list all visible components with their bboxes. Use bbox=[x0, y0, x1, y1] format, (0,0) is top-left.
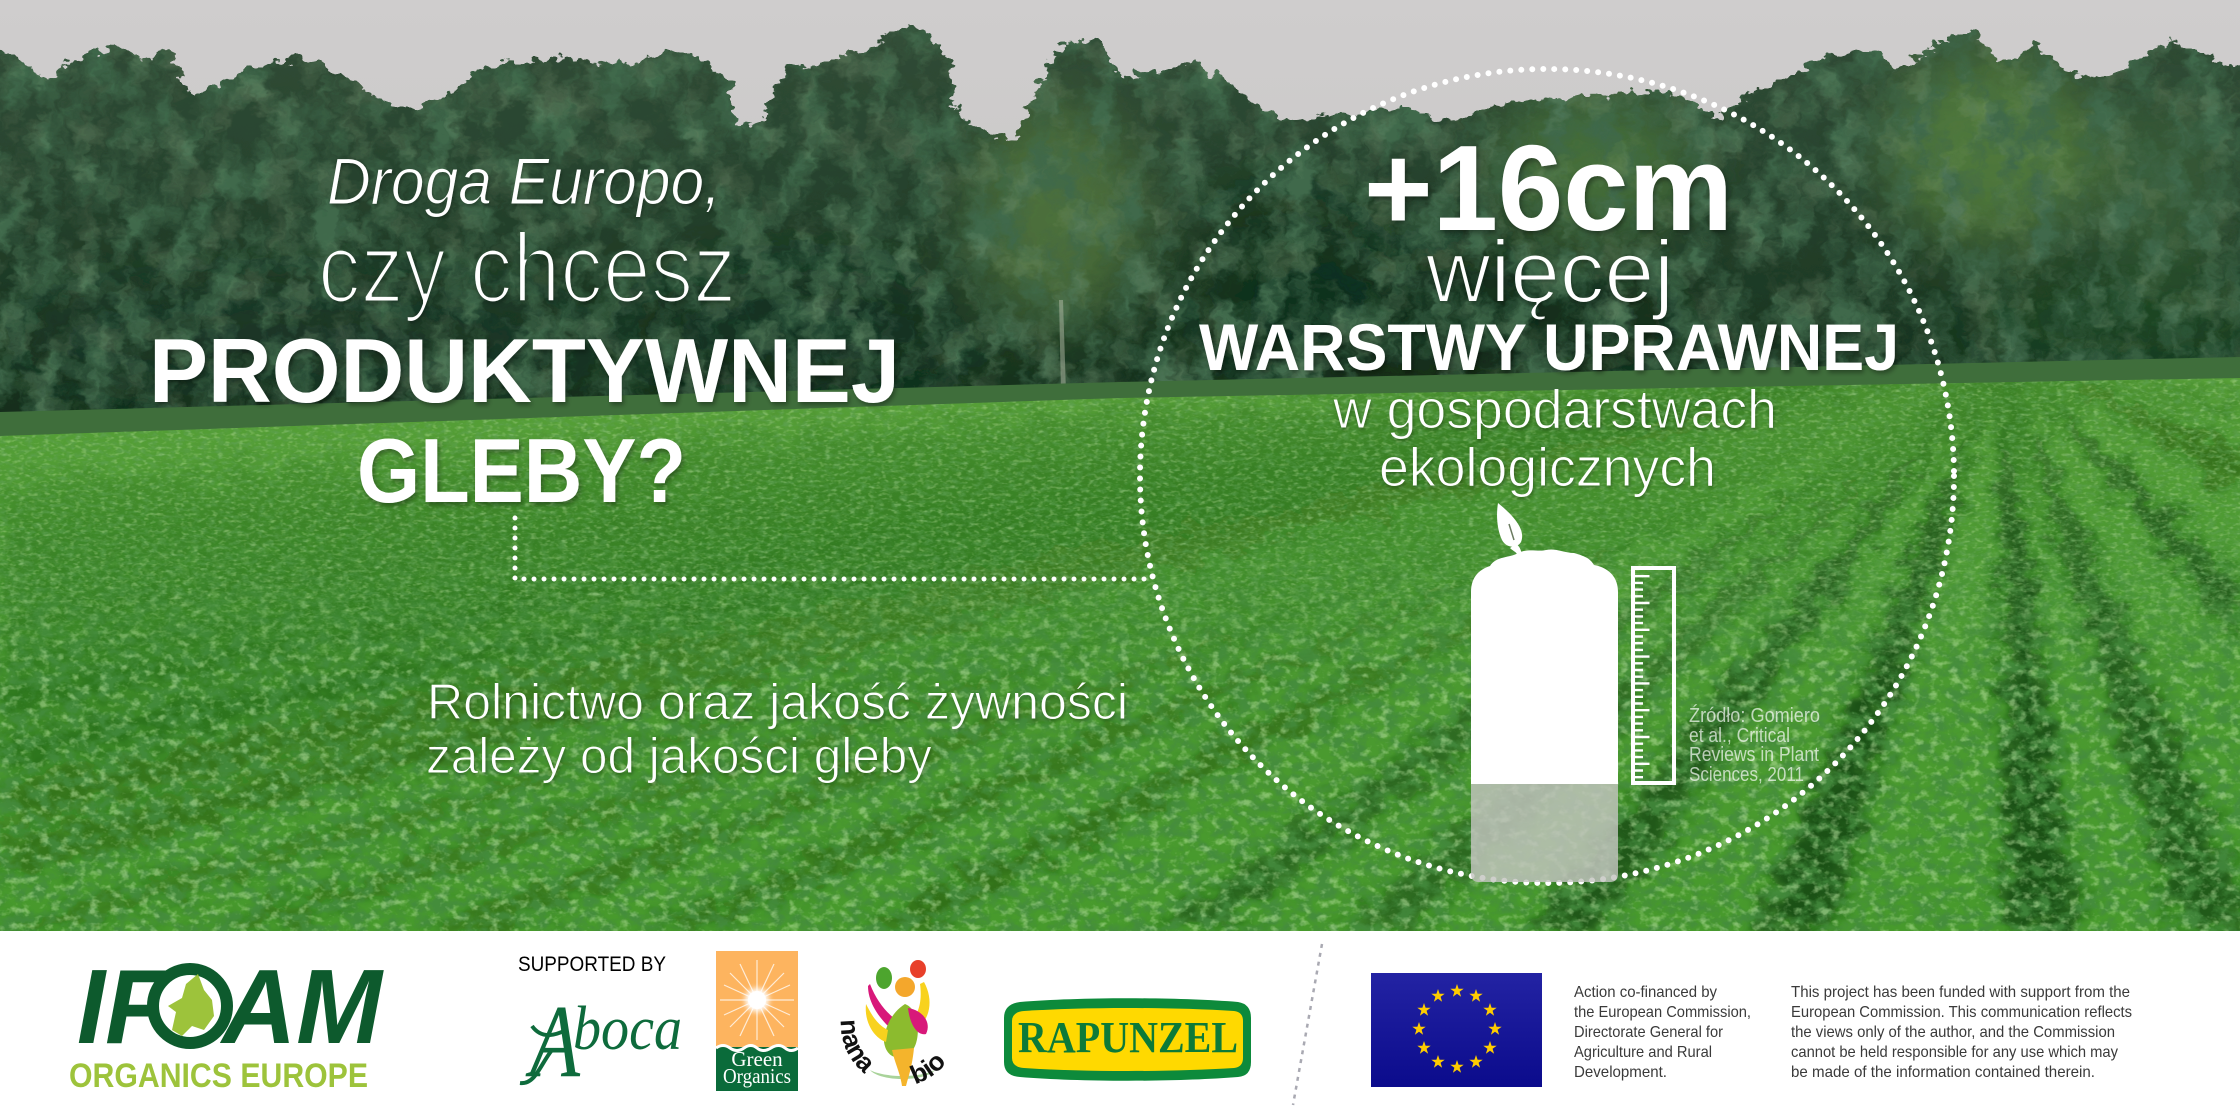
grass strip behind field bbox=[0, 357, 2240, 440]
headline line: GLEBY: GLEBY? bbox=[357, 421, 686, 522]
headline line: czy chcesz: czy chcesz bbox=[318, 213, 736, 323]
co-financing note: Agriculture and Rural bbox=[1574, 1044, 1712, 1061]
logo letters IF: IF bbox=[77, 948, 170, 1066]
body text: soil quality: zależy od jakości gleby bbox=[426, 728, 932, 784]
logo: Rapunzel bbox=[1004, 998, 1251, 1081]
source note: et al., Critical bbox=[1689, 725, 1790, 747]
disclaimer note: cannot be held responsible for any use which may bbox=[1791, 1044, 2118, 1061]
logo: Aboca: boca bbox=[573, 995, 682, 1063]
statistic label: więcej: więcej bbox=[1425, 222, 1674, 321]
logo: Green Organics: Green bbox=[731, 1047, 783, 1071]
headline line: Droga Europo: Droga Europo, bbox=[327, 144, 721, 218]
statistic: +16cm: +16cm bbox=[1364, 120, 1733, 256]
disclaimer note: This project has been funded with support from the bbox=[1791, 984, 2130, 1001]
icon: ruler scale bbox=[1633, 568, 1674, 783]
source note: Źródło: Gomiero bbox=[1689, 704, 1820, 727]
disclaimer note: European Commission. This communication reflects bbox=[1791, 1004, 2132, 1021]
logo globe with Europe bbox=[153, 969, 227, 1043]
supported by label: SUPPORTED BY bbox=[518, 953, 666, 976]
logo: Aboca bbox=[520, 984, 682, 1099]
disclaimer note: the views only of the author, and the Commission bbox=[1791, 1024, 2115, 1041]
logo: Green Organics: Organics bbox=[723, 1064, 791, 1088]
body text: soil quality bbox=[426, 674, 1128, 784]
co-financing note bbox=[1574, 984, 1751, 1081]
footer band bbox=[0, 931, 2240, 1120]
statistic label: WARSTWY UPRAWNEJ: WARSTWY UPRAWNEJ bbox=[1199, 310, 1899, 384]
co-financing note: Action co-financed by bbox=[1574, 984, 1717, 1001]
dotted footer divider bbox=[1293, 944, 1322, 1105]
dotted connector from headline to circle bbox=[515, 518, 1150, 579]
sun bbox=[720, 960, 794, 1040]
birch trunk bbox=[1059, 300, 1066, 392]
source note bbox=[1689, 704, 1820, 786]
circle statistic text bbox=[1199, 120, 1899, 498]
body text: soil quality: Rolnictwo oraz jakość żywności bbox=[427, 674, 1128, 730]
logo letters AM: AM bbox=[219, 948, 385, 1066]
icon: soil candle with sprout bbox=[1471, 503, 1618, 882]
disclaimer note bbox=[1791, 984, 2132, 1081]
co-financing note: Development. bbox=[1574, 1064, 1667, 1081]
headline line: PRODUKTYWNEJ: PRODUKTYWNEJ bbox=[149, 321, 900, 422]
logo: Rapunzel: RAPUNZEL bbox=[1018, 1013, 1238, 1062]
source note: Reviews in Plant bbox=[1689, 744, 1819, 766]
disclaimer note: be made of the information contained therein. bbox=[1791, 1064, 2095, 1081]
background sky bbox=[0, 0, 2240, 460]
source note: Sciences, 2011 bbox=[1689, 764, 1804, 786]
statistic label: w gospodarstwach: w gospodarstwach bbox=[1332, 378, 1777, 440]
logo: Green Organics bbox=[716, 951, 798, 1091]
co-financing note: the European Commission, bbox=[1574, 1004, 1751, 1021]
co-financing note: Directorate General for bbox=[1574, 1024, 1724, 1041]
logo: IFOAM Organics Europe bbox=[69, 948, 385, 1095]
logo subtitle: ORGANICS EUROPE bbox=[69, 1057, 368, 1095]
logo: Aboca: A bbox=[525, 984, 580, 1099]
sprout leaf bbox=[1497, 503, 1522, 558]
logo: nana bio: nana bbox=[840, 1020, 872, 1074]
dotted circle bbox=[1140, 69, 1954, 883]
headline question bbox=[149, 144, 900, 522]
background crop field bbox=[0, 350, 2240, 940]
logo: nana bio: bio bbox=[909, 1056, 944, 1084]
EU flag bbox=[1371, 973, 1542, 1087]
white topsoil column bbox=[1471, 550, 1618, 784]
background treeline bbox=[0, 24, 2240, 412]
statistic label: ekologicznych: ekologicznych bbox=[1379, 436, 1716, 498]
grey extra layer bbox=[1471, 784, 1618, 882]
logo: nana bio bbox=[840, 960, 944, 1086]
